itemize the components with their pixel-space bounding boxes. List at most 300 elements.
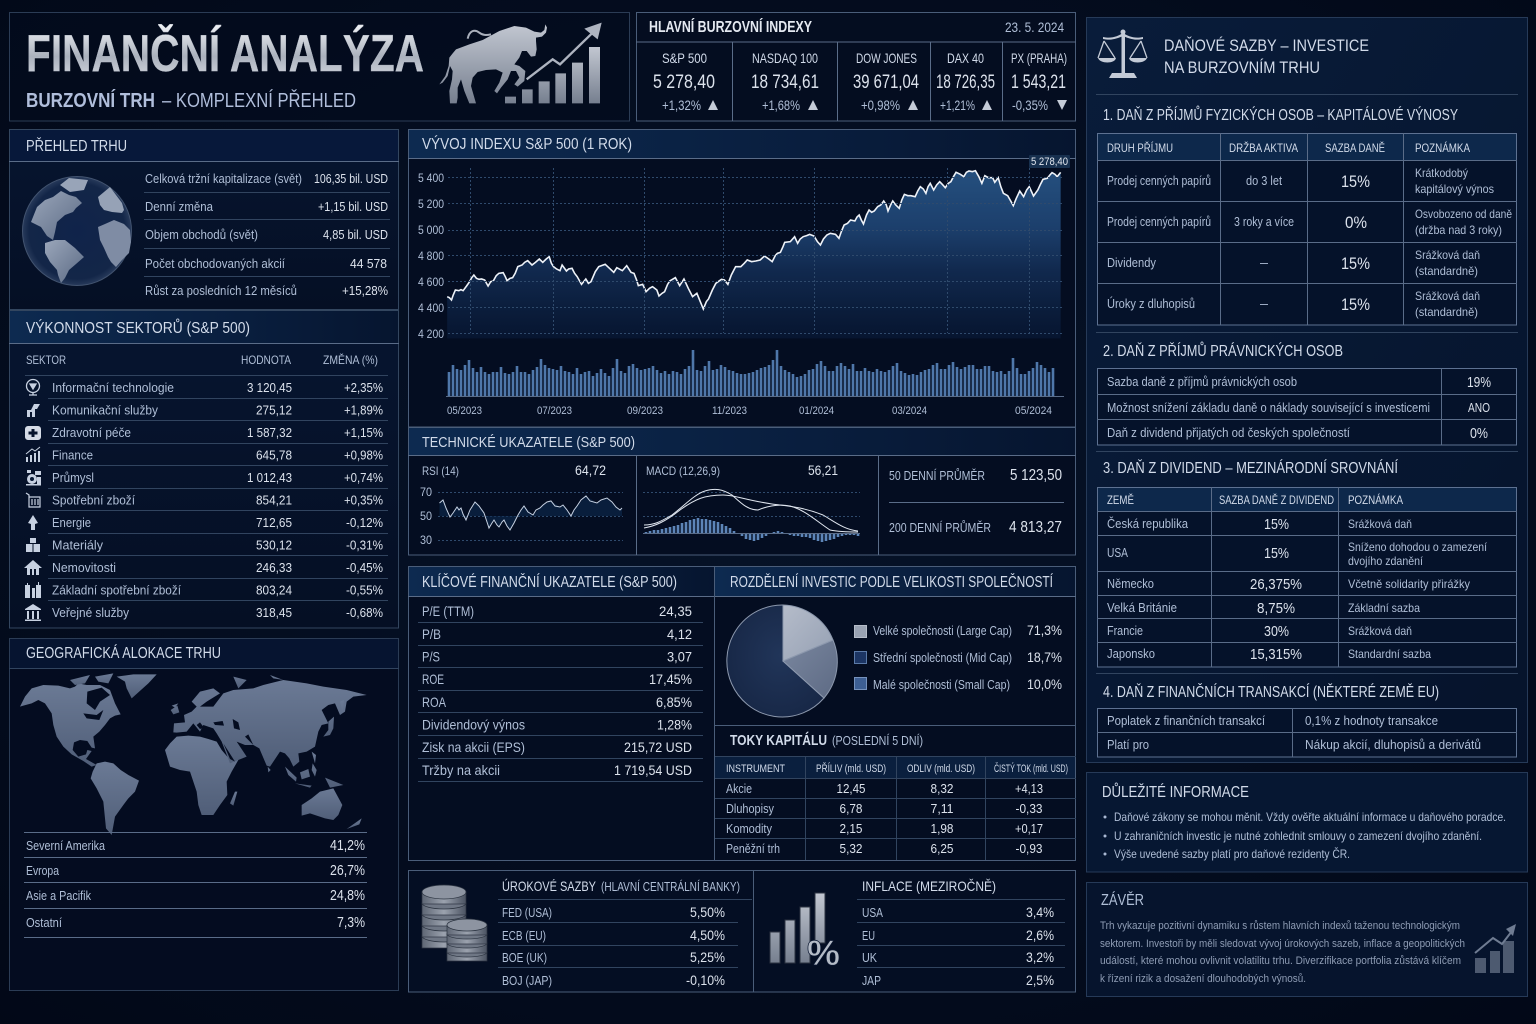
row: P/S: P/S [422,648,440,664]
icon: energy [28,515,38,530]
index: NASDAQ 100: NASDAQ 100 [752,50,818,66]
heading: interest rates: ÚROKOVÉ SAZBY [502,878,597,894]
bar chart: volume [446,350,1064,396]
heading: geographic allocation: GEOGRAFICKÁ ALOKACE TRHU [26,643,221,662]
row: EU [862,927,1054,943]
table: corporate tax: ANO [1468,400,1490,415]
RSI indicator [420,462,623,547]
row: bonds: -0,33 [1016,801,1042,816]
panel: geographic allocation [9,638,399,990]
table: capital gains: DRŽBA AKTIVA [1229,140,1298,155]
x axis dates: 05/2024 [1015,405,1052,417]
row: JAP [862,972,1054,988]
table: capital gains: Prodej cenných papírů [1107,173,1211,188]
table header: PŘÍLIV (mld. USD) [816,762,886,775]
row: shares: 8,32 [930,781,954,796]
index: DAX 40: DAX 40 [947,50,984,66]
icon: growth chart [1475,924,1516,973]
index: Dow Jones: DOW JONES [856,50,917,66]
icon: globe [22,176,132,286]
row: money market: -0,93 [1016,841,1042,856]
legend: small cap: Malé společnosti (Small Cap) [873,677,1010,692]
table: dividend tax by country: Německo [1107,576,1154,591]
heading: interest rates: (HLAVNÍ CENTRÁLNÍ BANKY) [601,879,740,894]
row: consumer staples: Základní spotřební zboží [52,582,181,598]
icon: bars with percent sign: % [807,934,840,973]
header panel: title and bull [10,12,630,121]
table header [26,352,378,367]
heading: capital flows: TOKY KAPITÁLU [730,732,827,749]
panel: market overview [9,130,399,310]
row: P/B: 4,12 [667,626,692,642]
table: dividend tax by country: 15,315% [1250,646,1302,663]
table header: ODLIV (mld. USD) [907,763,975,775]
row: UK: 3,2% [1026,949,1054,965]
row: money market: Peněžní trh [726,841,780,856]
index: S&amp;P 500: S&P 500 [662,50,707,66]
table: dividend tax by country: Standardní sazba [1348,647,1431,661]
row: money market: 5,32 [840,841,862,856]
moving averages: 5 123,50 [1010,467,1062,484]
heading: conclusion: ZÁVĚR [1101,890,1144,909]
x axis dates: 03/2024 [892,405,927,417]
row: real estate: Nemovitosti [52,560,116,575]
row: health care: Zdravotní péče [52,425,131,440]
table: dividend tax by country: Sníženo dohodou o zamezení [1348,540,1488,554]
conclusion text [1100,920,1465,985]
legend: large cap: 71,3% [1027,622,1062,638]
table: corporate tax: 0% [1470,425,1488,442]
value badge: 5 278,40 [1031,156,1068,168]
table: capital gains: DRUH PŘÍJMU [1107,140,1173,155]
row: utilities: 318,45 [256,605,292,620]
row: Asia and Pacific: Asie a Pacifik [26,888,91,903]
moving averages: 50 DENNÍ PRŮMĚR [889,468,985,483]
icon: finance [26,447,40,462]
conclusion text: k řízení rizik a dosažení dlouhodobých výnosů. [1100,973,1306,985]
conclusion text: sektorem. Investoři by měli sledovat vývoj úrokových sazeb, inflace a geopolitických [1100,938,1465,950]
row: industry: Průmysl [52,470,94,485]
row: BOE: BOE (UK) [502,950,547,965]
table: capital gains: 3 roky a více [1234,214,1294,229]
row: consumer goods: +0,35% [344,492,383,508]
table: corporate tax: Sazba daně z příjmů právnických osob [1107,374,1297,389]
table: capital gains: (standardně) [1415,264,1478,278]
row: revenue per share: Tržby na akcii [422,762,500,778]
index: NASDAQ 100: +1,68% [762,97,800,113]
row: other [26,914,365,931]
icon: consumer goods [26,493,40,507]
row: industry [52,470,383,485]
row: UK [862,949,1054,965]
panel: key financial ratios [408,566,714,860]
index: DAX 40: +1,21% [940,97,975,113]
row: bonds [726,801,1042,816]
row: ROE: ROE [422,671,444,687]
MACD indicator: 56,21 [808,462,838,478]
row: materials: -0,31% [346,538,383,552]
index: PX Praha [1011,50,1067,113]
panel: inflation [754,870,1076,992]
row: utilities: -0,68% [346,605,383,620]
section 4: financial transaction tax [1097,682,1517,757]
row: materials [52,538,383,552]
row: commodities: +0,17 [1015,821,1043,836]
table: dividend tax by country: Česká republika [1107,516,1189,531]
row: ROE: 17,45% [649,671,692,687]
row: dividend yield: 1,28% [657,716,692,732]
row: information technology: +2,35% [344,380,383,395]
row: JAP: 2,5% [1026,972,1054,988]
x axis dates [447,405,1052,417]
row: consumer goods [52,492,383,508]
row: other: Ostatní [26,915,62,930]
row: communication services: +1,89% [344,402,383,418]
row: commodities: 1,98 [930,821,954,836]
row: energy: Energie [52,515,91,530]
row: real estate: -0,45% [346,560,383,575]
row: trade volume [145,227,388,242]
row: USA [862,904,1054,920]
row: Asia and Pacific [26,887,365,904]
legend: mid cap: Střední společnosti (Mid Cap) [873,650,1012,665]
MACD indicator [643,462,860,542]
table: dividend tax by country: Základní sazba [1348,601,1420,615]
row: BOE [502,949,725,965]
icon: bars with percent sign [770,893,840,973]
row: industry: +0,74% [344,470,383,485]
icon: consumer staples [25,582,41,598]
row: ECB [502,927,725,943]
index: DAX 40: 18 726,35 [936,72,995,93]
row: ROA: 6,85% [656,694,692,710]
heading: technical indicators: TECHNICKÉ UKAZATELE (S&P 500) [422,434,635,451]
icon: information technology [26,380,40,395]
row: EPS: Zisk na akcii (EPS) [422,739,525,755]
row: finance: +0,98% [344,448,383,462]
table: dividend tax by country: Francie [1107,623,1143,638]
row: health care: +1,15% [344,425,383,440]
row: P/S: 3,07 [667,648,692,664]
y axis labels: 5 200 [418,197,444,211]
row: consumer staples [52,582,383,598]
index: S&amp;P 500 [653,50,718,113]
row: EPS: 215,72 USD [624,739,692,755]
row: Europe [26,862,365,879]
row: bonds: 7,11 [930,801,954,816]
title: FINANČNÍ ANALÝZA [26,24,424,83]
table: capital gains: 15% [1341,295,1370,314]
row: information technology [52,380,383,395]
row: ROE [422,671,692,687]
row: daily change: Denní změna [145,199,214,214]
row: trade volume: 4,85 bil. USD [323,227,388,242]
heading: inflation: INFLACE (MEZIROČNĚ) [862,878,996,894]
row: consumer staples: 803,24 [256,582,292,598]
heading: capital flows [730,732,923,749]
heading: allocation: ROZDĚLENÍ INVESTIC PODLE VELIKOSTI SPOLEČNOSTÍ [730,572,1053,591]
table: dividend tax by country: Srážková daň [1348,624,1412,638]
icon: materials [26,538,40,552]
table: corporate tax: Daň z dividend přijatých od českých společností [1107,425,1350,440]
row: EU: 2,6% [1026,927,1054,943]
row: P/E: P/E (TTM) [422,603,474,619]
table header: INSTRUMENT [726,763,785,775]
index: PX Praha: 1 543,21 [1011,72,1066,93]
world map [20,673,367,835]
table: dividend tax by country: Srážková daň [1348,517,1412,531]
table: capital gains: Prodej cenných papírů [1107,214,1211,229]
table: corporate tax [1097,368,1517,445]
row: P/E [422,603,692,619]
table: capital gains: Dividendy [1107,255,1156,270]
row: ROA: ROA [422,694,447,710]
row: dividend yield [422,716,692,732]
row: energy: 712,65 [256,515,292,530]
row: FED: 5,50% [690,904,725,920]
panel: allocation by company size [714,566,1076,726]
table: capital gains: Úroky z dluhopisů [1107,296,1195,311]
table: dividend tax by country: USA [1107,545,1128,560]
table: transaction tax [1097,708,1517,757]
date: 23. 5. 2024 [1005,19,1064,35]
row: information technology: Informační technologie [52,380,174,395]
row: health care [52,425,383,440]
RSI indicator: 70 [420,485,432,499]
row: North America: Severní Amerika [26,838,106,853]
panel: interest rates [408,870,754,992]
heading: indexes: HLAVNÍ BURZOVNÍ INDEXY [649,17,812,36]
table header: SEKTOR [26,353,66,367]
icon: utilities [25,604,41,621]
row: bonds: Dluhopisy [726,801,774,816]
table: transaction tax: 0,1% z hodnoty transakce [1305,713,1438,728]
index: PX Praha: PX (PRAHA) [1011,50,1067,66]
legend: small cap: 10,0% [1027,676,1062,692]
panel: conclusion [1086,882,1528,996]
table: capital gains: SAZBA DANĚ [1325,140,1385,155]
RSI indicator: 64,72 [575,462,606,478]
row: BOE: 5,25% [690,949,725,965]
row: finance: Finance [52,448,93,462]
row: revenue per share [422,762,692,778]
row: ECB: 4,50% [690,927,725,943]
row: energy: -0,12% [346,515,383,530]
row: consumer goods: Spotřební zboží [52,492,135,508]
table: capital gains: (standardně) [1415,305,1478,319]
row: shares: 12,45 [836,781,866,796]
index: Dow Jones: 39 671,04 [853,72,919,93]
pie chart [727,605,837,717]
table: capital gains [1097,133,1517,325]
index: NASDAQ 100: 18 734,61 [751,72,819,93]
table: capital gains: – [1260,255,1269,270]
row: consumer goods: 854,21 [256,492,292,508]
x axis dates: 11/2023 [712,405,747,417]
RSI indicator: 30 [420,533,432,547]
table: capital gains: do 3 let [1246,173,1282,188]
x axis dates: 05/2023 [447,405,482,417]
table: dividend tax by country: 8,75% [1257,600,1295,617]
RSI indicator: 50 [420,509,432,523]
table: capital gains: Srážková daň [1415,248,1480,262]
index: Dow Jones: +0,98% [861,97,900,113]
MACD indicator: MACD (12,26,9) [646,464,720,478]
row: daily change: +1,15 bil. USD [318,199,388,214]
table: dividend tax by country: POZNÁMKA [1348,492,1403,507]
panel: important information [1086,772,1528,872]
row: materials: Materiály [52,538,103,552]
row: North America: 41,2% [330,837,365,854]
bullet 2: U zahraničních investic je nutné zohlednit smlouvy o zamezení dvojího zdanění. [1114,829,1482,843]
row: market capitalisation: Celková tržní kapitalizace (svět) [145,171,302,186]
y axis labels: 4 200 [418,327,444,341]
row: shares: +4,13 [1015,781,1043,796]
heading: important information: DŮLEŽITÉ INFORMACE [1102,782,1249,801]
row: real estate: 246,33 [256,560,292,575]
row: shares: Akcie [726,781,752,796]
table header: ZMĚNA (%) [323,352,378,367]
row: finance: 645,78 [256,448,292,462]
x axis dates: 07/2023 [537,405,572,417]
table: capital gains: POZNÁMKA [1415,140,1470,155]
index: PX Praha: -0,35% [1012,97,1048,113]
subtitle [26,89,356,112]
panel: capital flows [714,726,1076,860]
row: bonds: 6,78 [840,801,862,816]
section 2: corporate income tax: 2. DAŇ Z PŘÍJMŮ PRÁVNICKÝCH OSOB [1103,341,1343,360]
conclusion text: Trh vykazuje pozitivní dynamiku s růstem hlavních indexů taženou technologickým [1100,920,1460,932]
section 3: dividend tax comparison [1097,458,1517,667]
y axis labels [418,171,444,341]
row: dividend yield: Dividendový výnos [422,716,525,732]
icon: scales of justice [1098,30,1147,78]
table: capital gains: Osvobozeno od daně [1415,207,1512,221]
row: UK: UK [862,950,877,965]
index: S&amp;P 500: 5 278,40 [653,72,715,93]
moving averages [889,467,1064,536]
section 4: financial transaction tax: 4. DAŇ Z FINANČNÍCH TRANSAKCÍ (NĚKTERÉ ZEMĚ EU) [1103,682,1439,701]
panel: sector performance [9,310,399,628]
table: dividend tax by country: dvojího zdanění [1348,554,1424,568]
table: transaction tax: Poplatek z finančních transakcí [1107,713,1265,728]
panel: tax rates [1086,18,1528,762]
heading: tax rates: DAŇOVÉ SAZBY – INVESTICE [1164,36,1369,55]
row: FED [502,904,725,920]
row: North America [26,837,365,854]
index: S&amp;P 500: +1,32% [662,97,701,113]
table: capital gains: Krátkodobý [1415,166,1468,180]
row: FED: FED (USA) [502,905,552,920]
row: market capitalisation: 106,35 bil. USD [314,171,388,186]
row: 12 month growth: +15,28% [342,283,388,298]
row: P/S [422,648,692,664]
legend: mid cap: 18,7% [1027,649,1062,665]
table: dividend tax by country: Včetně solidarity přirážky [1348,577,1470,591]
heading: sector performance: VÝKONNOST SEKTORŮ (S&P 500) [26,318,250,337]
table header [726,762,1068,775]
table: capital gains: – [1260,296,1269,311]
row: trade volume: Objem obchodů (svět) [145,227,258,242]
y axis labels: 4 400 [418,301,444,315]
row: JAP: JAP [862,973,881,988]
row: shares [726,781,1043,796]
heading: market overview: PŘEHLED TRHU [26,136,127,155]
row: P/B: P/B [422,626,441,642]
section 3: dividend tax comparison: 3. DAŇ Z DIVIDEND – MEZINÁRODNÍ SROVNÁNÍ [1103,458,1398,477]
row: materials: 530,12 [256,538,292,552]
table: capital gains: 0% [1345,213,1367,232]
table: dividend tax by country [1097,487,1517,667]
row: ECB: ECB (EU) [502,928,546,943]
table header: ČISTÝ TOK (mld. USD) [994,762,1068,775]
table: dividend tax by country: 15% [1264,516,1289,533]
table: dividend tax by country: Japonsko [1107,646,1155,661]
table: dividend tax by country: Velká Británie [1107,600,1177,615]
index: NASDAQ 100 [751,50,819,113]
row: energy [52,515,383,530]
row: utilities: Veřejné služby [52,605,129,620]
row: USA: 3,4% [1026,904,1054,920]
heading: interest rates [502,878,740,894]
row: communication services: Komunikační služby [52,402,158,418]
subtitle: – KOMPLEXNÍ PŘEHLED [162,89,356,112]
table header: HODNOTA [241,353,291,367]
row: traded shares [145,256,387,271]
row: Europe: Evropa [26,863,60,878]
icon: health care [25,426,41,440]
row: 12 month growth: Růst za posledních 12 měsíců [145,283,297,298]
moving averages: 200 DENNÍ PRŮMĚR [889,520,991,535]
row: commodities: Komodity [726,821,772,836]
table: capital gains: (držba nad 3 roky) [1415,223,1502,237]
conclusion text: událostí, které mohou ovlivnit volatilitu trhu. Diverzifikace portfolia zůstává klíčem [1100,955,1461,967]
row: communication services: 275,12 [256,402,292,418]
x axis dates: 01/2024 [799,405,834,417]
section 1: personal income tax [1097,105,1517,325]
x axis dates: 09/2023 [627,405,663,417]
row: USA: USA [862,905,883,920]
row: EPS [422,739,692,755]
icon: coin stacks [422,885,487,961]
row: health care: 1 587,32 [247,425,292,440]
row: ROA [422,694,692,710]
icon: communication services [27,404,40,417]
row: traded shares: Počet obchodovaných akcií [145,256,285,271]
table: capital gains: kapitálový výnos [1415,182,1494,196]
panel: technical indicators [408,428,1076,555]
table: capital gains: 15% [1341,172,1370,191]
row: finance [52,448,383,462]
row: revenue per share: 1 719,54 USD [614,762,692,778]
table: dividend tax by country: ZEMĚ [1107,492,1134,507]
heading: chart: VÝVOJ INDEXU S&P 500 (1 ROK) [422,134,632,153]
row: industry: 1 012,43 [247,470,292,485]
row: commodities [726,821,1043,836]
icon: bull with rising bars and arrow [439,23,602,103]
panel: S&amp;P 500 chart [408,130,1076,427]
table: dividend tax by country: 30% [1264,623,1289,640]
y axis labels: 4 800 [418,249,444,263]
row: daily change [145,199,388,214]
panel: main stock indexes [636,12,1076,121]
heading: tax rates: NA BURZOVNÍM TRHU [1164,58,1320,77]
moving averages: 4 813,27 [1009,519,1062,536]
table: dividend tax by country: 26,375% [1250,576,1302,593]
legend: large cap: Velké společnosti (Large Cap) [873,623,1012,638]
row: real estate [52,560,383,575]
row: BOJ: BOJ (JAP) [502,973,552,988]
